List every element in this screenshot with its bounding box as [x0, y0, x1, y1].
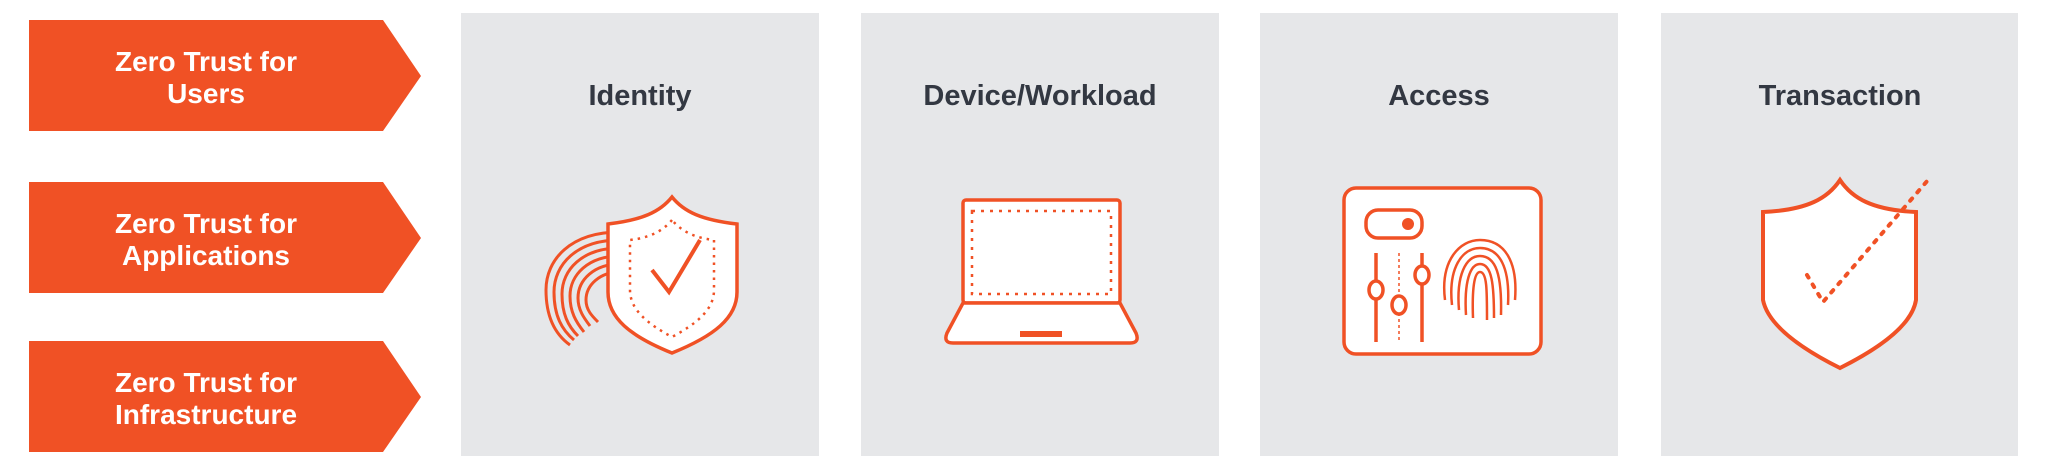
heading: Access: Access [1388, 80, 1490, 112]
arrow: Zero Trust for Infrastructure [29, 341, 421, 452]
arrow: Zero Trust for Applications: Applications [122, 240, 290, 271]
arrow: Zero Trust for Applications [29, 182, 421, 293]
heading: Device/Workload: Device/Workload [923, 80, 1157, 112]
arrow: Zero Trust for Infrastructure: Infrastructure [115, 399, 297, 430]
icon: laptop [946, 200, 1137, 343]
panel: Device/Workload [861, 13, 1219, 456]
panel: Transaction [1661, 13, 2018, 456]
panel: Access [1260, 13, 1618, 456]
arrow: Zero Trust for Infrastructure: Zero Trust for [115, 367, 297, 398]
icon: fingerprint with shield [546, 197, 737, 353]
icon: shield with dotted check [1763, 180, 1928, 368]
arrow: Zero Trust for Applications: Zero Trust for [115, 208, 297, 239]
heading: Transaction: Transaction [1759, 80, 1921, 112]
panel: Identity [461, 13, 819, 456]
heading: Identity: Identity [588, 80, 692, 112]
icon: access control panel [1344, 188, 1541, 354]
arrow: Zero Trust for Users: Users [167, 78, 245, 109]
arrow: Zero Trust for Users: Zero Trust for [115, 46, 297, 77]
arrow: Zero Trust for Users [29, 20, 421, 131]
